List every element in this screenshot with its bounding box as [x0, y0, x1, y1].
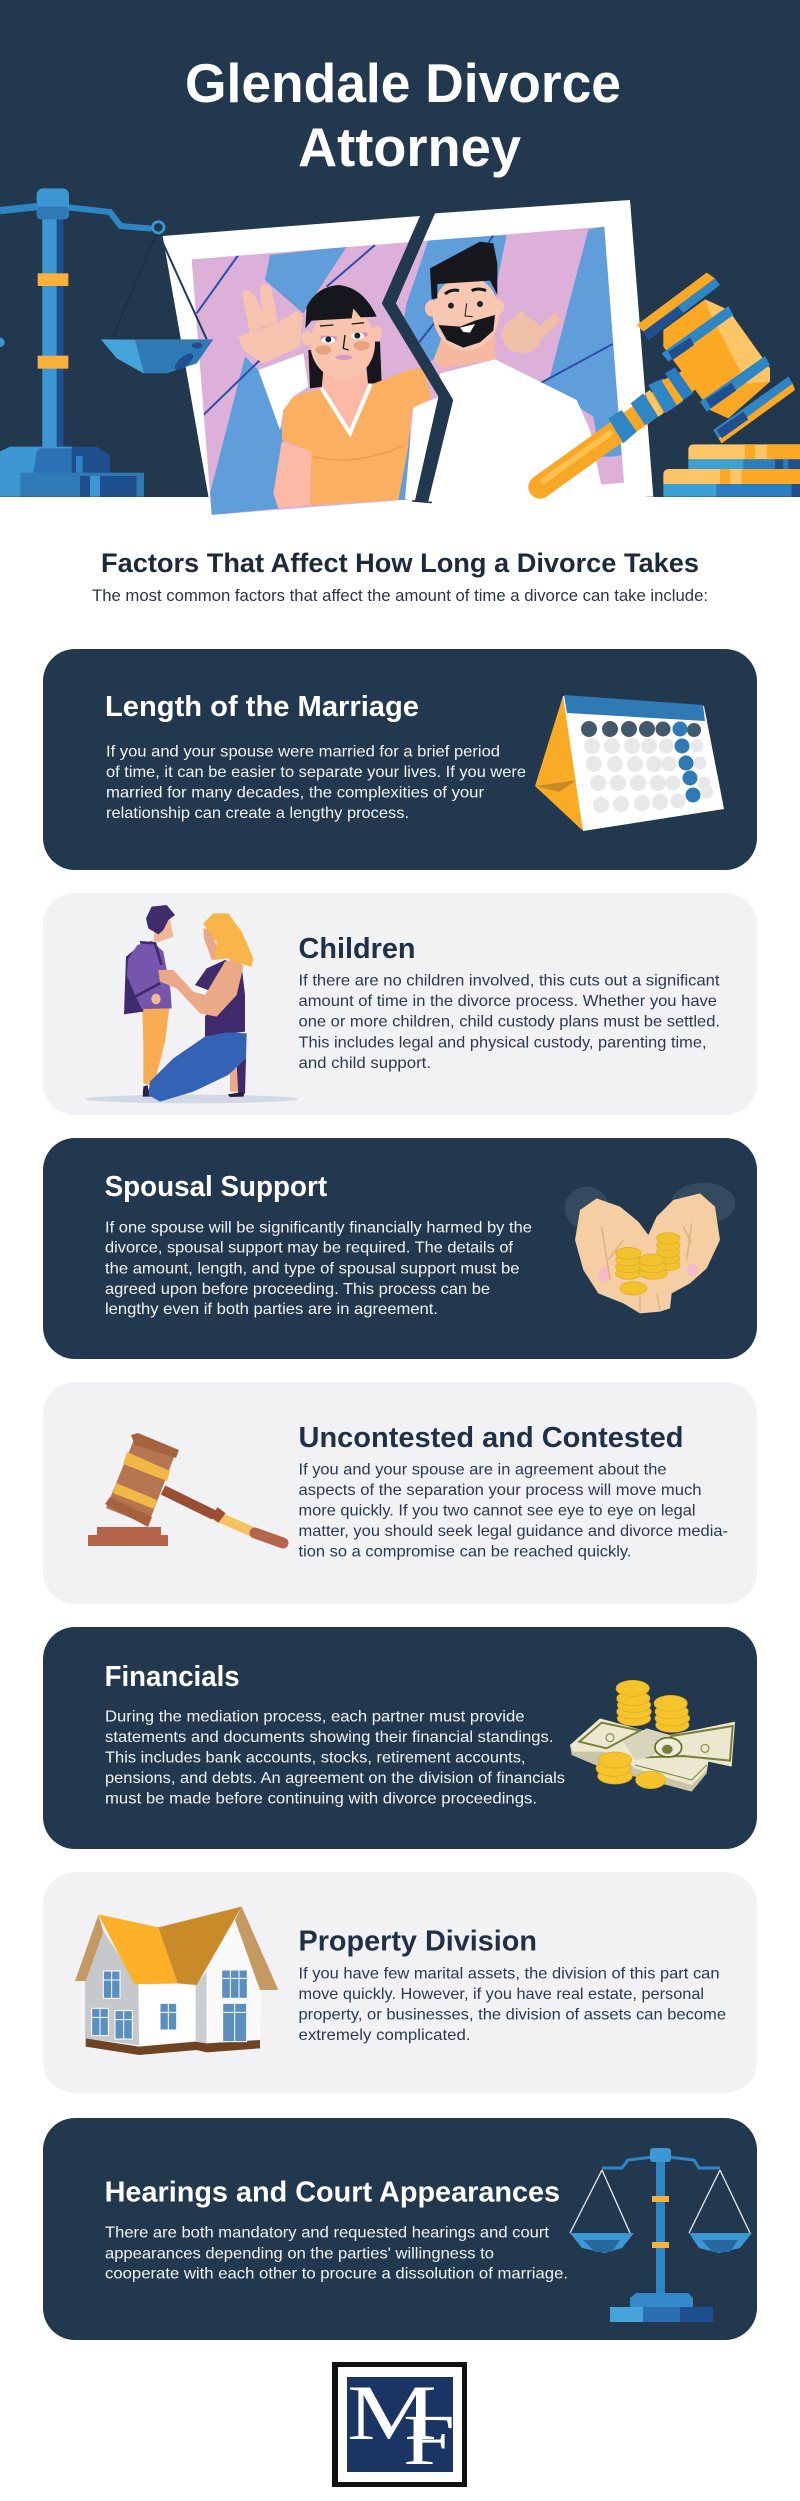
- illustration: books under gavel: [663, 444, 800, 497]
- text block: children: amount of time in the divorce process. Whether you have: [298, 993, 717, 1010]
- heading: spousal support: Spousal Support: [105, 1171, 327, 1203]
- text block: spousal support: agreed upon before proceeding. This process can be: [105, 1281, 490, 1298]
- title: Attorney: [298, 116, 521, 178]
- heading: hearings and court appearances: Hearings and Court Appearances: [105, 2177, 560, 2209]
- icon: brown gavel: [88, 1433, 283, 1546]
- subheading: The most common factors that affect the amount of time a divorce can take include:: [92, 587, 708, 605]
- illustration: large blue scale: [0, 188, 213, 497]
- panel: financials: [43, 1627, 757, 1849]
- icon: house: [75, 1907, 278, 2055]
- text block: hearings and court appearances: [105, 2225, 568, 2283]
- logo: F: [403, 2400, 455, 2480]
- text block: children: [298, 973, 720, 1072]
- text block: uncontested and contested: tion so a compromise can be reached quickly.: [298, 1544, 632, 1561]
- text block: children: This includes legal and physical custody, parenting time,: [298, 1034, 706, 1051]
- text block: property division: If you have few marital assets, the division of this part can: [298, 1966, 720, 1983]
- text block: uncontested and contested: If you and your spouse are in agreement about the: [298, 1462, 667, 1479]
- title: Glendale Divorce: [185, 52, 621, 114]
- logo: M: [347, 2369, 437, 2456]
- heading: children: Children: [298, 933, 416, 965]
- text block: length of the marriage: If you and your spouse were married for a brief period: [106, 744, 500, 760]
- panel: uncontested and contested: [43, 1382, 757, 1604]
- text block: property division: property, or businesses, the division of assets can become: [298, 2006, 726, 2023]
- panel: children: [43, 893, 757, 1115]
- icon: hands holding coins: [565, 1183, 735, 1313]
- text block: spousal support: If one spouse will be significantly financially harmed by the: [105, 1219, 532, 1236]
- illustration: torn couple photo: [160, 200, 660, 520]
- header background: [0, 0, 800, 497]
- text block: property division: move quickly. However, if you have real estate, personal: [298, 1986, 704, 2003]
- logo: [332, 2362, 467, 2487]
- panel: property division: [43, 1872, 757, 2093]
- text block: property division: extremely complicated.: [298, 2027, 470, 2044]
- text block: children: If there are no children involved, this cuts out a significant: [298, 973, 720, 990]
- heading: property division: Property Division: [298, 1926, 537, 1958]
- text block: financials: pensions, and debts. An agreement on the division of financials: [105, 1770, 565, 1787]
- text block: financials: must be made before continuing with divorce proceedings.: [105, 1790, 537, 1807]
- title: [185, 52, 621, 178]
- text block: hearings and court appearances: There are both mandatory and requested hearings and court: [105, 2225, 550, 2242]
- text block: length of the marriage: relationship can create a lengthy process.: [106, 805, 409, 822]
- text block: spousal support: [105, 1219, 532, 1318]
- text block: financials: This includes bank accounts, stocks, retirement accounts,: [105, 1750, 526, 1767]
- text block: hearings and court appearances: cooperate with each other to procure a dissolution of marriage.: [105, 2266, 568, 2283]
- icon: calendar: [535, 695, 724, 831]
- text block: children: one or more children, child custody plans must be settled.: [298, 1014, 720, 1031]
- heading: financials: Financials: [105, 1661, 240, 1693]
- text block: financials: During the mediation process, each partner must provide: [105, 1709, 525, 1726]
- heading: Factors That Affect How Long a Divorce Takes: [101, 548, 699, 578]
- text block: uncontested and contested: aspects of the separation your process will move much: [298, 1482, 702, 1499]
- text block: financials: statements and documents showing their financial standings.: [105, 1729, 554, 1746]
- icon: cash and coins: [570, 1680, 735, 1792]
- heading: length of the marriage: Length of the Marriage: [105, 691, 419, 723]
- panel: spousal support: [43, 1138, 757, 1359]
- text block: property division: [298, 1966, 726, 2044]
- text block: hearings and court appearances: appearances depending on the parties' willingness to: [105, 2245, 494, 2262]
- text block: uncontested and contested: [298, 1462, 728, 1561]
- illustration: large orange gavel: [540, 273, 795, 487]
- text block: length of the marriage: [106, 744, 526, 822]
- panel: hearings and court appearances: [43, 2118, 757, 2340]
- icon: small scale: [570, 2148, 752, 2322]
- icon: parent kneeling with child: [85, 905, 298, 1103]
- text block: uncontested and contested: matter, you should seek legal guidance and divorce media-: [298, 1523, 728, 1540]
- text block: spousal support: lengthy even if both parties are in agreement.: [105, 1301, 438, 1318]
- text block: length of the marriage: married for many decades, the complexities of your: [106, 784, 485, 802]
- text block: uncontested and contested: more quickly. If you two cannot see eye to eye on legal: [298, 1503, 696, 1520]
- text block: financials: [105, 1709, 565, 1807]
- text block: children: and child support.: [298, 1055, 431, 1072]
- heading: uncontested and contested: Uncontested and Contested: [298, 1422, 684, 1454]
- panel: length of the marriage: [43, 649, 757, 870]
- text block: spousal support: the amount, length, and type of spousal support must be: [105, 1260, 520, 1277]
- text block: spousal support: divorce, spousal support may be required. The details of: [105, 1240, 514, 1257]
- text block: length of the marriage: of time, it can be easier to separate your lives. If you were: [106, 764, 526, 781]
